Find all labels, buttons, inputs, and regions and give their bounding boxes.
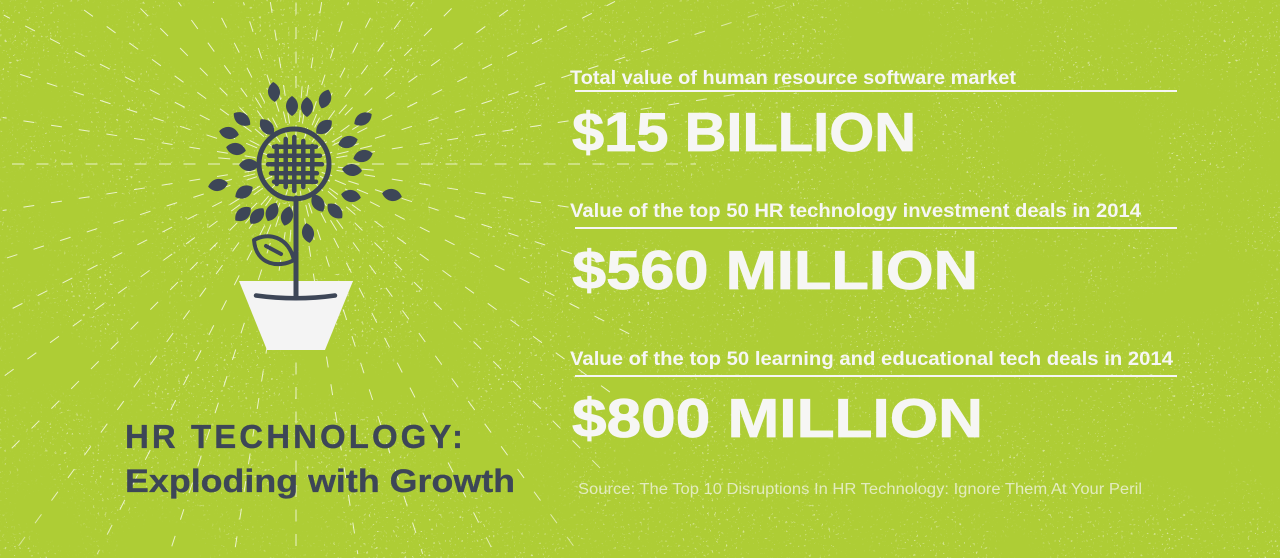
stat: HR software market: $15 BILLION	[572, 101, 916, 163]
stat: learning and education deals	[570, 349, 1177, 449]
stat: HR software market	[570, 68, 1177, 163]
stem leaf	[254, 236, 294, 264]
stat: HR technology deals	[570, 201, 1177, 301]
leaves around the flower	[207, 82, 403, 244]
stat: HR technology deals: $560 MILLION	[572, 239, 978, 301]
flower pot	[239, 281, 353, 350]
source note: Source: The Top 10 Disruptions In HR Technology: Ignore Them At Your Peril	[578, 481, 1142, 498]
stat: HR software market: Total value of human resource software market	[570, 68, 1017, 89]
stem and soil line	[256, 198, 335, 298]
stat: learning and education deals: $800 MILLION	[572, 387, 983, 449]
stat: HR technology deals: Value of the top 50 HR technology investment deals in 2014	[570, 201, 1141, 222]
title: Exploding with Growth	[125, 463, 515, 499]
stat: learning and education deals: Value of the top 50 learning and educational tech deals in 2014	[570, 349, 1173, 370]
icon: potted sunflower	[207, 82, 403, 350]
title	[125, 418, 515, 499]
flower head	[259, 129, 329, 199]
title: HR TECHNOLOGY:	[125, 418, 463, 455]
